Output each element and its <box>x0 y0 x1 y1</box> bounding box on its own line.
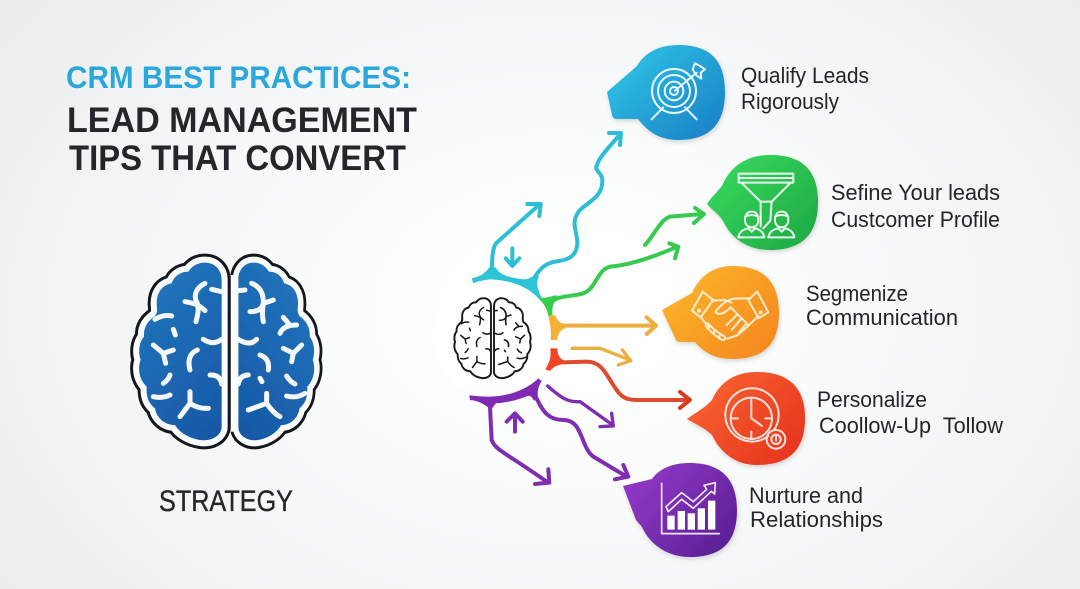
icon: target with arrow <box>652 63 705 119</box>
hub circle with small brain <box>433 278 553 398</box>
icon: handshake <box>692 292 768 340</box>
icon: clock <box>725 388 785 449</box>
item 5: nurture relationships <box>623 463 883 557</box>
label text: Communication <box>806 305 958 330</box>
icon: small outline brain <box>454 298 531 378</box>
label text <box>817 387 1003 438</box>
item 4: personalize follow-up <box>687 372 1003 465</box>
title line: CRM best practices: CRM BEST PRACTICES: <box>66 59 411 95</box>
bubble: purple <box>623 463 737 557</box>
bubble: blue <box>607 45 725 140</box>
red branch <box>545 348 690 408</box>
label text: Segmenize <box>806 281 908 306</box>
label text: Coollow-Up Tollow <box>819 413 1003 438</box>
label text: Relationships <box>750 507 883 532</box>
branching arrows <box>469 133 704 484</box>
title <box>66 59 417 178</box>
bubble: red <box>687 372 805 465</box>
label text: Rigorously <box>741 89 839 114</box>
label text <box>831 180 1000 232</box>
green branches <box>539 208 704 316</box>
label text: Nurture and <box>749 483 863 508</box>
item 3: segment communication <box>662 266 958 359</box>
label text <box>741 63 869 114</box>
label text: Qualify Leads <box>741 63 869 88</box>
label: strategy: STRATEGY <box>159 485 293 518</box>
icon: rising bar chart <box>662 483 719 534</box>
teal branches <box>472 133 621 299</box>
icon: funnel with people <box>738 174 794 237</box>
title line: lead management: LEAD MANAGEMENT <box>67 100 417 140</box>
icon: large blue brain <box>139 263 314 440</box>
label text: Sefine Your leads <box>831 180 1000 205</box>
label text <box>806 281 958 330</box>
label text: Custcomer Profile <box>831 207 1000 232</box>
bubble: orange <box>662 266 779 359</box>
label text <box>749 483 883 532</box>
item 2: define customer profile <box>707 155 1000 250</box>
item 1: qualify leads <box>607 45 869 140</box>
label text: Personalize <box>817 387 927 412</box>
purple branches <box>469 378 628 484</box>
bubble: green <box>707 155 818 250</box>
title line: tips that convert: TIPS THAT CONVERT <box>69 138 406 178</box>
yellow branches <box>548 315 656 365</box>
